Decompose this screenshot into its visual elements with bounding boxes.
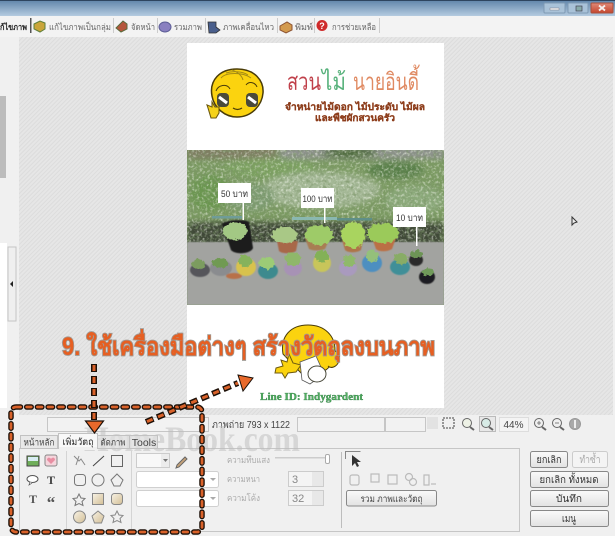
price sign: 100 baht (301, 188, 334, 223)
merge button: รวม ภาพและวัตถุ (360, 494, 423, 505)
poster title: นายอินดี้ (353, 64, 420, 96)
small pots (190, 254, 435, 284)
icon: print (280, 22, 292, 33)
zoom toolbar icons: 44% (503, 420, 524, 431)
heading: step 9: 9. ใช้เครื่องมือต่างๆ สร้างวัตถุลงบนภาพ (62, 329, 435, 363)
small plant foliage (191, 250, 434, 276)
toolbar tabs: พิมพ์ (295, 22, 313, 32)
property controls: 32 (292, 493, 304, 505)
photo: potted plants (187, 146, 445, 305)
tool icons column one: T (29, 492, 37, 506)
color and style pickers (136, 454, 218, 506)
merge button (346, 490, 436, 506)
tool panel (20, 448, 520, 532)
icon: combine (159, 22, 171, 32)
icon: batch edit (34, 21, 45, 32)
poster title: สวน (287, 69, 321, 96)
poster title: ไม้ (320, 68, 346, 96)
poster title (287, 64, 420, 96)
tool icons column one: “ (47, 493, 55, 512)
zoom toolbar icons (427, 416, 580, 432)
toolbar tabs: แก้ไขภาพเป็นกลุ่ม (49, 21, 111, 33)
toolbar tabs: การช่วยเหลือ (332, 22, 376, 32)
page: poster (187, 43, 445, 408)
icon: smiley mascot top (207, 69, 263, 118)
icon: animation (208, 22, 220, 33)
tool icons column one (27, 455, 57, 512)
toolbar tabs: รวมภาพ (174, 22, 202, 32)
panel tabs: เพิ่มวัตถุ (62, 435, 94, 448)
toolbar tabs: ก้ไขภาพ (0, 22, 27, 32)
canvas area (19, 37, 613, 415)
callout: dashed tool highlight (11, 407, 202, 532)
price sign: 10 baht: 10 บาท (396, 213, 423, 224)
price sign: 10 baht (393, 207, 426, 246)
mouse cursor (572, 217, 577, 225)
panel tabs: ตัดภาพ (100, 438, 126, 448)
title bar (0, 0, 615, 16)
property controls: ความหนา (227, 474, 260, 484)
watermark: HomeBook.com (84, 419, 300, 459)
price sign: 100 baht: 100 บาท (302, 194, 332, 205)
property controls (227, 454, 330, 506)
action buttons: เมนู (562, 514, 576, 525)
arrow: down to tools tab (86, 364, 104, 433)
action buttons: บันทึก (556, 493, 582, 505)
toolbar tabs: ภาพเคลื่อนไหว (223, 21, 274, 32)
line id text: Line ID: Indygardent (260, 391, 363, 403)
panel tabs: Tools (132, 437, 156, 449)
property controls: 3 (292, 474, 298, 486)
action buttons: ทำซ้ำ (580, 452, 600, 466)
toolbar tabs: จัดหน้า (131, 22, 155, 32)
large pots (222, 220, 396, 253)
property controls: ความทึบแสง (227, 455, 270, 465)
large plant foliage (223, 222, 399, 248)
price sign: 50 baht: 50 บาท (221, 189, 248, 200)
arrow: to canvas image (146, 375, 253, 422)
arrow select tool and object icons (346, 452, 436, 486)
tool icons shapes (73, 456, 123, 523)
action buttons: ยกเลิก ทั้งหมด (540, 472, 598, 486)
window buttons (544, 3, 613, 13)
status row (0, 415, 615, 435)
icon: layout (116, 21, 127, 32)
poster subtitle (285, 101, 425, 124)
property controls: ความโค้ง (227, 493, 260, 503)
action buttons: ยกเลิก (536, 455, 562, 466)
status row: ภาพถ่าย 793 x 1122 (212, 420, 290, 431)
icon: smiley mascot bottom (275, 325, 340, 384)
toolbar tabs (0, 16, 615, 37)
concrete ledge (187, 242, 444, 305)
action buttons (530, 452, 608, 526)
icon: help (316, 20, 328, 31)
poster subtitle: และพืชผักสวนครัว (315, 112, 395, 124)
poster subtitle: จำหน่ายไม้ดอก ไม้ประดับ ไม้ผล (285, 101, 425, 113)
price sign: 50 baht (218, 183, 251, 220)
tool icons column one: T (47, 473, 55, 487)
icon: help: ? (319, 21, 325, 31)
panel tabs (20, 434, 158, 450)
panel tabs: หน้าหลัก (24, 438, 55, 448)
left side panel (0, 37, 16, 408)
